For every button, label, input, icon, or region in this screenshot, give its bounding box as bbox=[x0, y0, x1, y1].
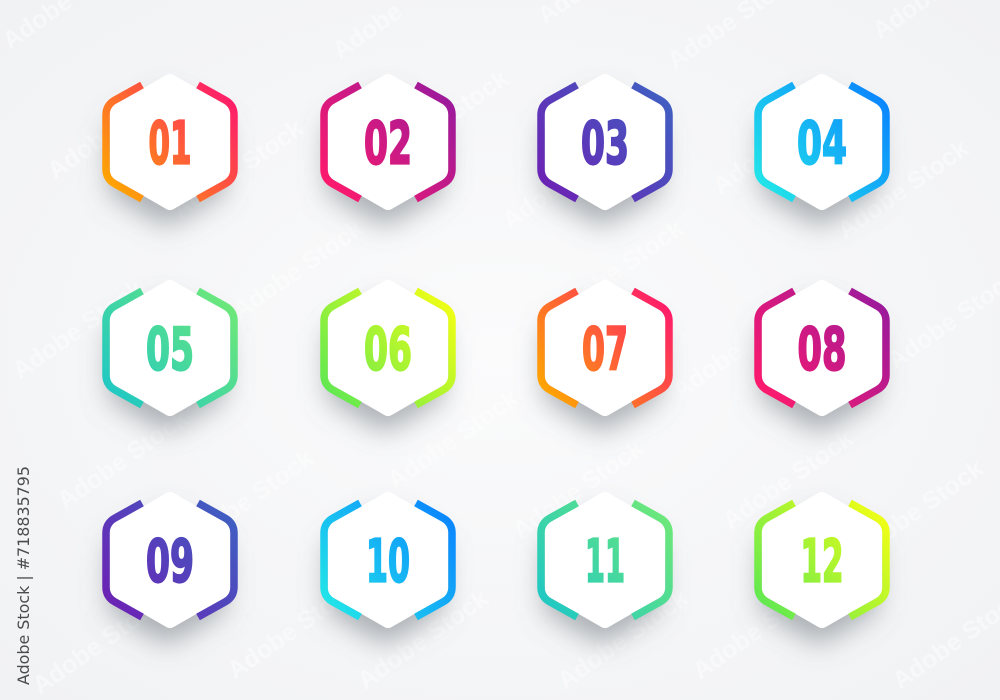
badge 03: 03 bbox=[581, 108, 629, 178]
badge 11 bbox=[541, 499, 669, 639]
badge 01: 01 bbox=[148, 108, 192, 178]
watermarks: Adobe bbox=[667, 337, 747, 405]
stock id caption: Adobe Stock | #718835795 bbox=[14, 466, 33, 685]
badge 05 bbox=[106, 287, 234, 427]
watermarks: Adobe Stock bbox=[707, 89, 849, 200]
badge 02 bbox=[324, 81, 452, 221]
badge 03 bbox=[541, 81, 669, 221]
badge 09: 09 bbox=[146, 526, 194, 596]
badge 06: 06 bbox=[364, 314, 412, 384]
watermarks: Adobe Stock bbox=[222, 574, 364, 685]
badge 02: 02 bbox=[364, 108, 412, 178]
badge 01 bbox=[106, 81, 234, 221]
badge 09 bbox=[106, 499, 234, 639]
watermarks: Adobe Stock bbox=[507, 434, 649, 545]
badge 07 bbox=[541, 287, 669, 427]
badge 06 bbox=[324, 287, 452, 427]
watermarks: Adobe Stock bbox=[687, 574, 829, 685]
badge 08 bbox=[758, 287, 886, 427]
badge 04 bbox=[758, 81, 886, 221]
watermarks: Adobe Stock bbox=[847, 454, 989, 565]
watermarks: Adobe Stock bbox=[42, 74, 184, 185]
badge 08: 08 bbox=[798, 314, 846, 384]
watermarks: Adobe Stock bbox=[7, 274, 149, 385]
watermarks: Adobe Stock bbox=[227, 214, 369, 325]
badge 07: 07 bbox=[582, 314, 628, 384]
watermarks: Adobe Stock bbox=[717, 424, 859, 535]
watermarks: Adobe Stock bbox=[27, 589, 169, 700]
watermarks: Adobe Stock bbox=[382, 384, 524, 495]
watermarks: Adobe Stock bbox=[167, 114, 309, 225]
badge 11: 11 bbox=[585, 526, 625, 596]
watermarks: Adobe Stock bbox=[497, 124, 639, 235]
badge 12 bbox=[758, 499, 886, 639]
watermarks: Adobe Stock bbox=[547, 214, 689, 325]
watermarks: Adobe Stock bbox=[177, 444, 319, 555]
watermarks: Adobe Stock bbox=[552, 584, 694, 695]
badge 10: 10 bbox=[366, 526, 410, 596]
watermarks: Adobe Stock bbox=[832, 134, 974, 245]
badge 04: 04 bbox=[797, 108, 847, 178]
watermarks: Adobe Stock bbox=[372, 64, 514, 175]
badge 10 bbox=[324, 499, 452, 639]
watermarks: Adobe Stock bbox=[352, 584, 494, 695]
watermarks: Adobe Stock bbox=[52, 404, 194, 515]
badge 12: 12 bbox=[800, 526, 844, 596]
badge 05: 05 bbox=[146, 314, 194, 384]
